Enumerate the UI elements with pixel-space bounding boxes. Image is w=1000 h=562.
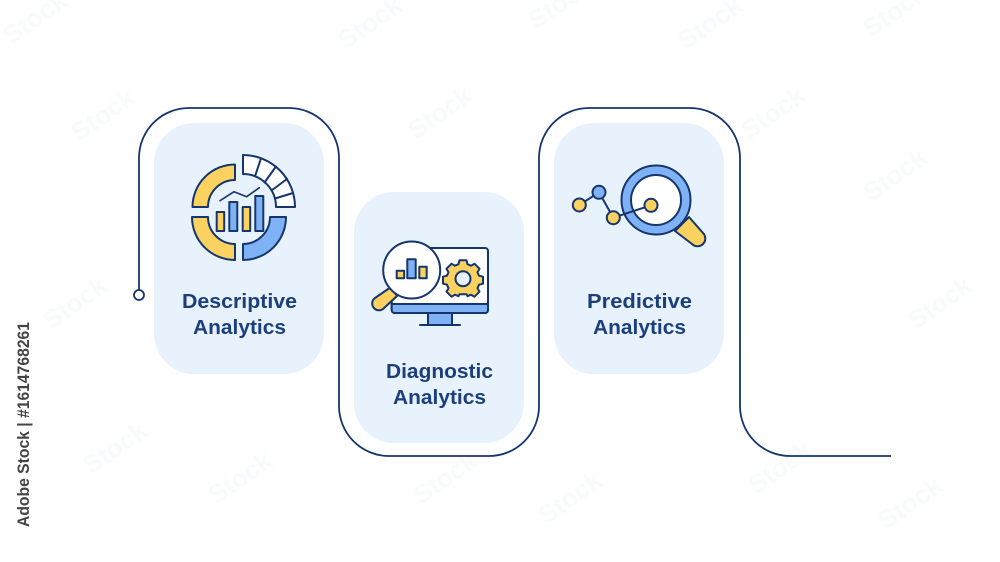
icon: descriptive analytics donut chart: [192, 155, 295, 260]
bar chart: [217, 196, 263, 231]
infographic canvas: Stock: [77, 415, 153, 480]
monitor body: [392, 248, 488, 313]
heading: predictive analytics: Predictive: [587, 291, 692, 313]
magnified bars: [397, 259, 427, 278]
donut segment: bottom right: [243, 217, 286, 260]
heading: diagnostic analytics: Analytics: [393, 387, 486, 409]
donut segment: bottom left: [192, 217, 235, 260]
panel: descriptive analytics background: [154, 123, 324, 374]
infographic canvas: Stock: [402, 80, 478, 145]
magnifier outer ring: [622, 166, 690, 234]
monitor stand: [428, 313, 452, 325]
donut segment: top right scale: [243, 155, 295, 207]
line start marker: [134, 290, 144, 300]
infographic canvas: Stock: [37, 270, 113, 335]
heading: descriptive analytics: Analytics: [193, 317, 286, 339]
heading: diagnostic analytics: Diagnostic: [386, 361, 493, 383]
monitor bottom band: [392, 304, 488, 313]
infographic canvas: Stock: [735, 80, 811, 145]
infographic canvas: Stock: [857, 142, 933, 207]
icon: gear: [443, 260, 483, 297]
infographic canvas: Stock: [65, 82, 141, 147]
magnifier lens: [383, 242, 440, 298]
magnifier lens: [631, 175, 681, 225]
infographic canvas: Stock: [742, 435, 818, 500]
infographic canvas: Stock: [202, 445, 278, 510]
infographic canvas: Stock: [407, 445, 483, 510]
monitor base: [420, 324, 460, 326]
heading: predictive analytics: Analytics: [593, 317, 686, 339]
panel: predictive analytics background: [554, 123, 724, 374]
infographic canvas: Stock: [872, 470, 948, 535]
icon: diagnostic analytics monitor and magnifier: [372, 242, 488, 325]
heading: descriptive analytics: Descriptive: [182, 291, 297, 313]
panel: diagnostic analytics background: [354, 192, 524, 443]
data points: [573, 186, 658, 224]
infographic canvas: Stock: [532, 465, 608, 530]
magnifier handle: [372, 287, 397, 310]
infographic canvas: Stock: [902, 270, 978, 335]
stock id caption: Adobe Stock | #1614768261: [15, 322, 33, 527]
donut segment: top left: [192, 164, 235, 207]
magnifier handle: [675, 217, 705, 246]
data point connectors: [579, 192, 651, 218]
trend line: [220, 188, 259, 201]
connecting serpentine line: [139, 108, 891, 456]
icon: predictive analytics magnifier and data points: [573, 166, 705, 246]
